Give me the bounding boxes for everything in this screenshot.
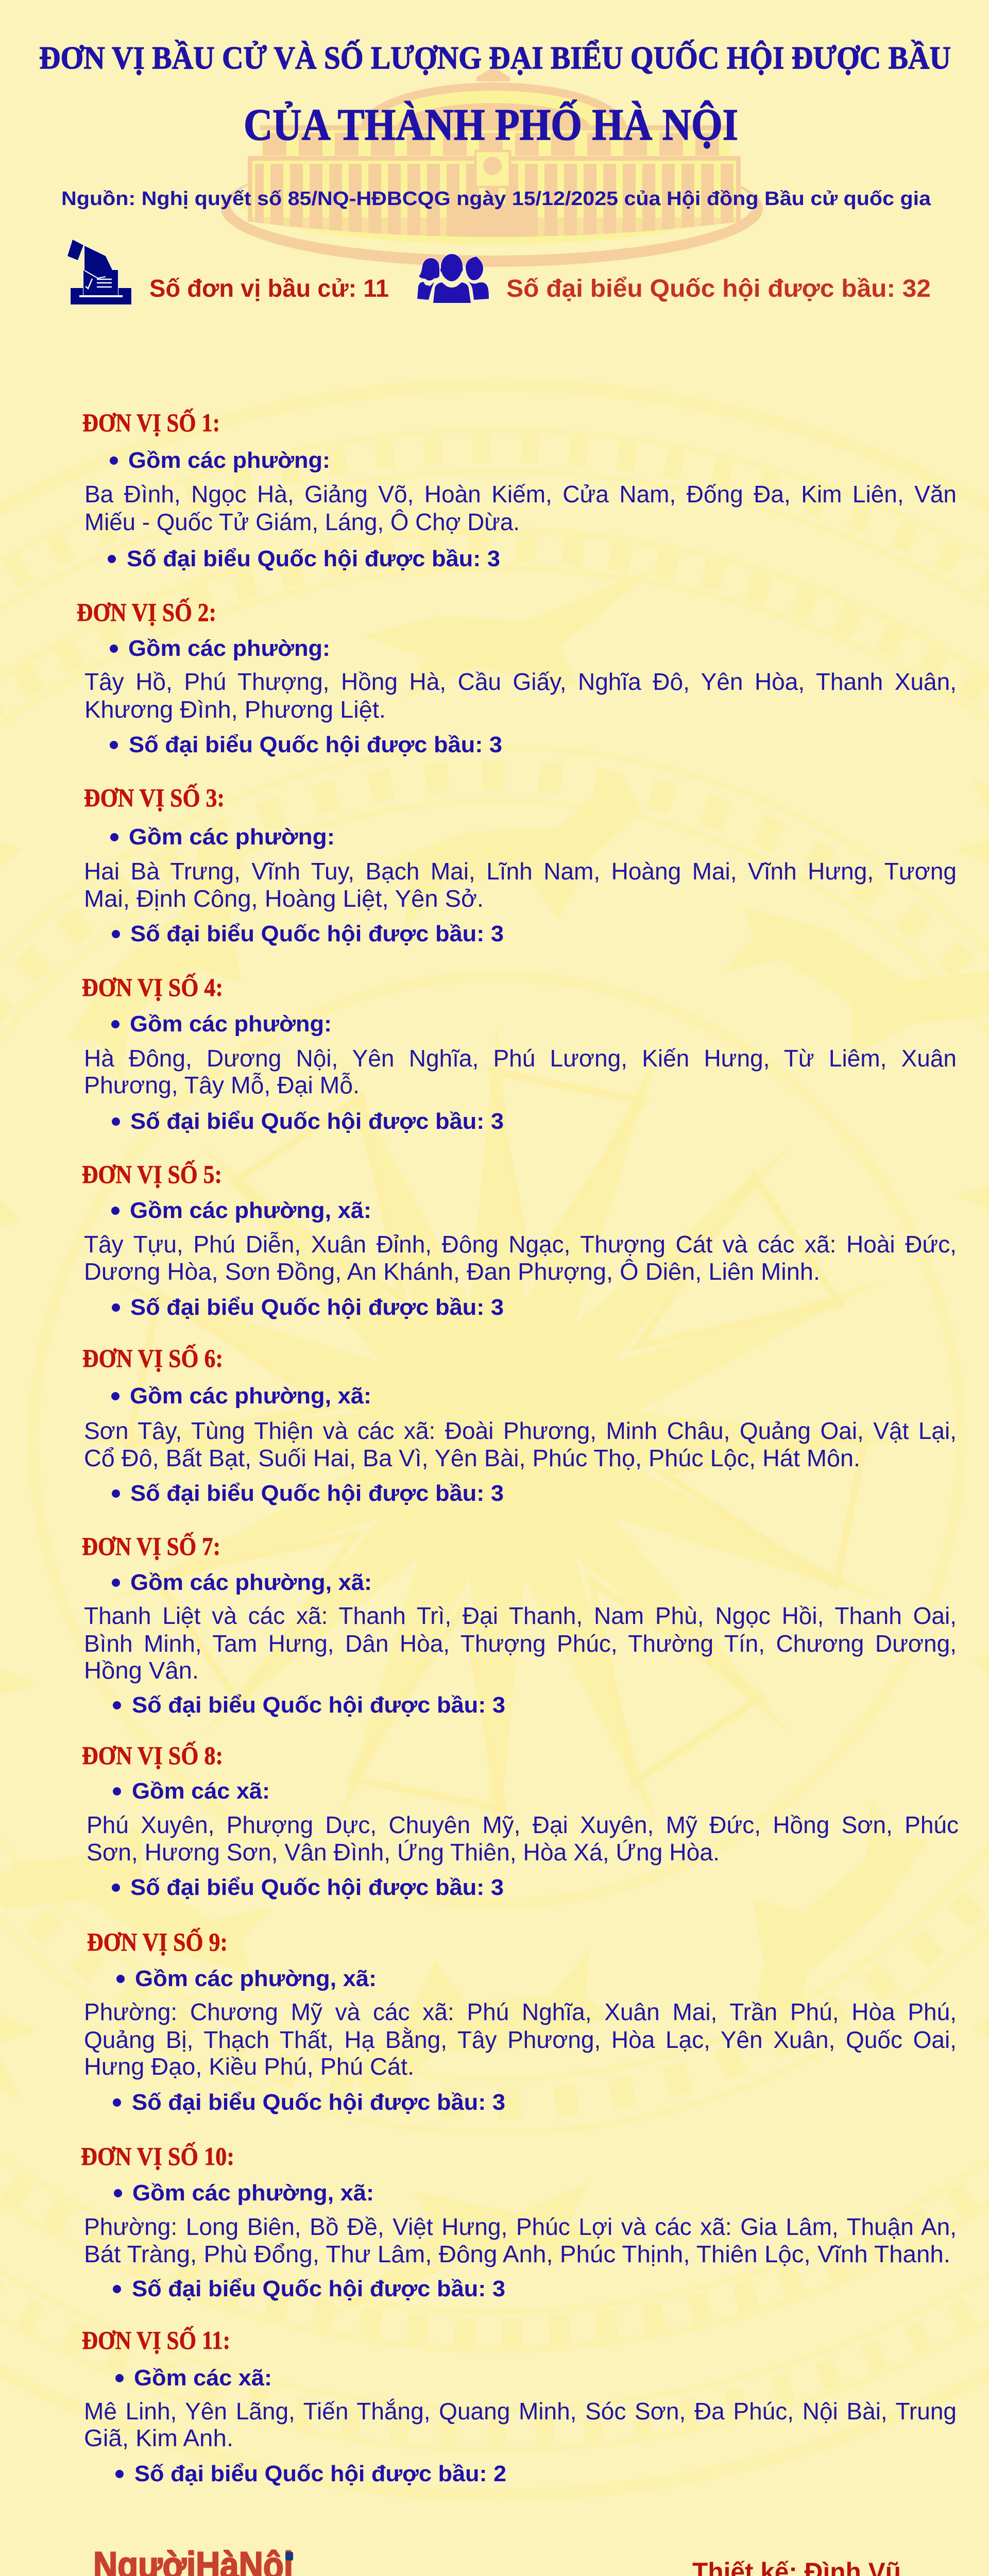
list heading: Gồm các xã: (134, 2365, 272, 2391)
list heading: Gồm các phường, xã: (132, 2180, 374, 2206)
ward list: Hồng Vân. (84, 1657, 199, 1684)
list heading: Gồm các xã: (132, 1778, 270, 1804)
stat label: Số đơn vị bầu cử: 11 (149, 275, 389, 302)
ward list: Khương Đình, Phương Liệt. (84, 696, 386, 723)
stat label: Số đại biểu Quốc hội được bầu: 32 (506, 275, 931, 302)
unit heading: ĐƠN VỊ SỐ 1: (82, 408, 220, 437)
ward list: Phú Xuyên, Phượng Dực, Chuyên Mỹ, Đại Xuyên, Mỹ Đức, Hồng Sơn, Phúc (87, 1811, 959, 1838)
ward list: Hưng Đạo, Kiều Phú, Phú Cát. (84, 2053, 414, 2080)
deputies count: Số đại biểu Quốc hội được bầu: 3 (130, 1109, 504, 1134)
ward list (84, 1417, 957, 1471)
ward list: Hai Bà Trưng, Vĩnh Tuy, Bạch Mai, Lĩnh Nam, Hoàng Mai, Vĩnh Hưng, Tương (84, 858, 957, 885)
ward list: Giã, Kim Anh. (84, 2425, 233, 2451)
deputies count: Số đại biểu Quốc hội được bầu: 3 (132, 2090, 505, 2115)
deputies count: Số đại biểu Quốc hội được bầu: 3 (130, 1875, 504, 1900)
ward list: Mai, Định Công, Hoàng Liệt, Yên Sở. (84, 885, 484, 912)
panel: unit 10 (81, 2141, 957, 2301)
unit heading: ĐƠN VỊ SỐ 5: (82, 1159, 222, 1189)
unit heading: ĐƠN VỊ SỐ 9: (87, 1927, 228, 1956)
panel: unit 1 (82, 408, 957, 571)
ward list: Mê Linh, Yên Lãng, Tiến Thắng, Quang Minh, Sóc Sơn, Đa Phúc, Nội Bài, Trung (84, 2398, 957, 2425)
stat: number of electoral units (67, 240, 389, 304)
stat: number of deputies (417, 254, 931, 303)
ward list (84, 480, 957, 535)
panel: unit 7 (82, 1531, 957, 1718)
unit heading: ĐƠN VỊ SỐ 2: (77, 597, 216, 626)
deputies count: Số đại biểu Quốc hội được bầu: 3 (130, 1481, 504, 1506)
ward list (84, 1998, 957, 2080)
ward list (84, 2397, 957, 2451)
ward list: Tây Hồ, Phú Thượng, Hồng Hà, Cầu Giấy, Nghĩa Đô, Yên Hòa, Thanh Xuân, (84, 668, 957, 695)
deputies count: Số đại biểu Quốc hội được bầu: 3 (130, 1295, 504, 1320)
unit heading: ĐƠN VỊ SỐ 8: (82, 1740, 223, 1770)
ward list: Phương, Tây Mỗ, Đại Mỗ. (84, 1072, 360, 1098)
unit heading: ĐƠN VỊ SỐ 10: (81, 2141, 234, 2171)
ward list: Phường: Long Biên, Bồ Đề, Việt Hưng, Phúc Lợi và các xã: Gia Lâm, Thuận An, (84, 2213, 957, 2240)
source note: Nguồn: Nghị quyết số 85/NQ-HĐBCQG ngày 15/12/2025 của Hội đồng Bầu cử quốc gia (61, 188, 931, 210)
ward list: Quảng Bị, Thạch Thất, Hạ Bằng, Tây Phương, Hòa Lạc, Yên Xuân, Quốc Oai, (84, 2026, 957, 2053)
panel: unit 2 (77, 597, 957, 757)
ward list (84, 857, 957, 912)
ward list: Bát Tràng, Phù Đổng, Thư Lâm, Đông Anh, Phúc Thịnh, Thiên Lộc, Vĩnh Thanh. (84, 2241, 950, 2267)
panel: unit 4 (82, 972, 957, 1134)
deputies count: Số đại biểu Quốc hội được bầu: 2 (134, 2461, 506, 2486)
unit heading: ĐƠN VỊ SỐ 3: (84, 783, 225, 812)
ward list: Phường: Chương Mỹ và các xã: Phú Nghĩa, Xuân Mai, Trần Phú, Hòa Phú, (84, 1998, 957, 2025)
ward list (87, 1811, 959, 1866)
ward list (84, 1044, 957, 1098)
list heading: Gồm các phường, xã: (130, 1198, 371, 1223)
ward list: Miếu - Quốc Tử Giám, Láng, Ô Chợ Dừa. (84, 509, 520, 535)
ward list (84, 2213, 957, 2267)
ward list: Sơn, Hương Sơn, Vân Đình, Ứng Thiên, Hòa Xá, Ứng Hòa. (87, 1839, 720, 1866)
list heading: Gồm các phường: (129, 824, 335, 850)
list heading: Gồm các phường: (128, 448, 330, 473)
ward list: Bình Minh, Tam Hưng, Dân Hòa, Thượng Phúc, Thường Tín, Chương Dương, (84, 1630, 957, 1657)
list heading: Gồm các phường, xã: (135, 1966, 377, 1991)
ward list: Dương Hòa, Sơn Đồng, An Khánh, Đan Phượng, Ô Diên, Liên Minh. (84, 1258, 820, 1285)
unit heading: ĐƠN VỊ SỐ 11: (82, 2325, 230, 2354)
ward list: Hà Đông, Dương Nội, Yên Nghĩa, Phú Lương, Kiến Hưng, Từ Liêm, Xuân (84, 1045, 957, 1072)
title line 2: CỦA THÀNH PHỐ HÀ NỘI (244, 99, 738, 149)
deputies count: Số đại biểu Quốc hội được bầu: 3 (132, 2276, 505, 2301)
deputies count: Số đại biểu Quốc hội được bầu: 3 (127, 546, 500, 571)
panel: unit 9 (84, 1927, 957, 2115)
deputies count: Số đại biểu Quốc hội được bầu: 3 (129, 732, 502, 757)
panel: unit 6 (82, 1343, 957, 1506)
list heading: Gồm các phường: (128, 636, 330, 661)
deputies count: Số đại biểu Quốc hội được bầu: 3 (130, 921, 504, 946)
list heading: Gồm các phường: (130, 1011, 332, 1037)
ward list: Cổ Đô, Bất Bạt, Suối Hai, Ba Vì, Yên Bài, Phúc Thọ, Phúc Lộc, Hát Môn. (84, 1445, 860, 1471)
panel: unit 8 (82, 1740, 959, 1900)
unit heading: ĐƠN VỊ SỐ 4: (82, 972, 223, 1002)
ward list: Thanh Liệt và các xã: Thanh Trì, Đại Thanh, Nam Phù, Ngọc Hồi, Thanh Oai, (84, 1602, 957, 1629)
icon: hand casting ballot (67, 240, 131, 304)
icon: group of people (417, 254, 489, 303)
ward list (84, 1230, 957, 1285)
panel: unit 5 (82, 1159, 957, 1320)
list heading: Gồm các phường, xã: (130, 1383, 371, 1409)
background: National Assembly building watermark (221, 67, 763, 267)
ward list: Ba Đình, Ngọc Hà, Giảng Võ, Hoàn Kiếm, Cửa Nam, Đống Đa, Kim Liên, Văn (84, 481, 957, 507)
unit heading: ĐƠN VỊ SỐ 7: (82, 1531, 220, 1561)
ward list (84, 668, 957, 723)
deputies count: Số đại biểu Quốc hội được bầu: 3 (132, 1692, 505, 1718)
ward list (84, 1602, 957, 1684)
ward list: Sơn Tây, Tùng Thiện và các xã: Đoài Phương, Minh Châu, Quảng Oai, Vật Lại, (84, 1417, 957, 1444)
unit heading: ĐƠN VỊ SỐ 6: (82, 1343, 223, 1372)
panel: unit 11 (82, 2325, 957, 2486)
list heading: Gồm các phường, xã: (130, 1570, 372, 1595)
ward list: Tây Tựu, Phú Diễn, Xuân Đỉnh, Đông Ngạc, Thượng Cát và các xã: Hoài Đức, (84, 1231, 957, 1258)
panel: unit 3 (84, 783, 957, 946)
